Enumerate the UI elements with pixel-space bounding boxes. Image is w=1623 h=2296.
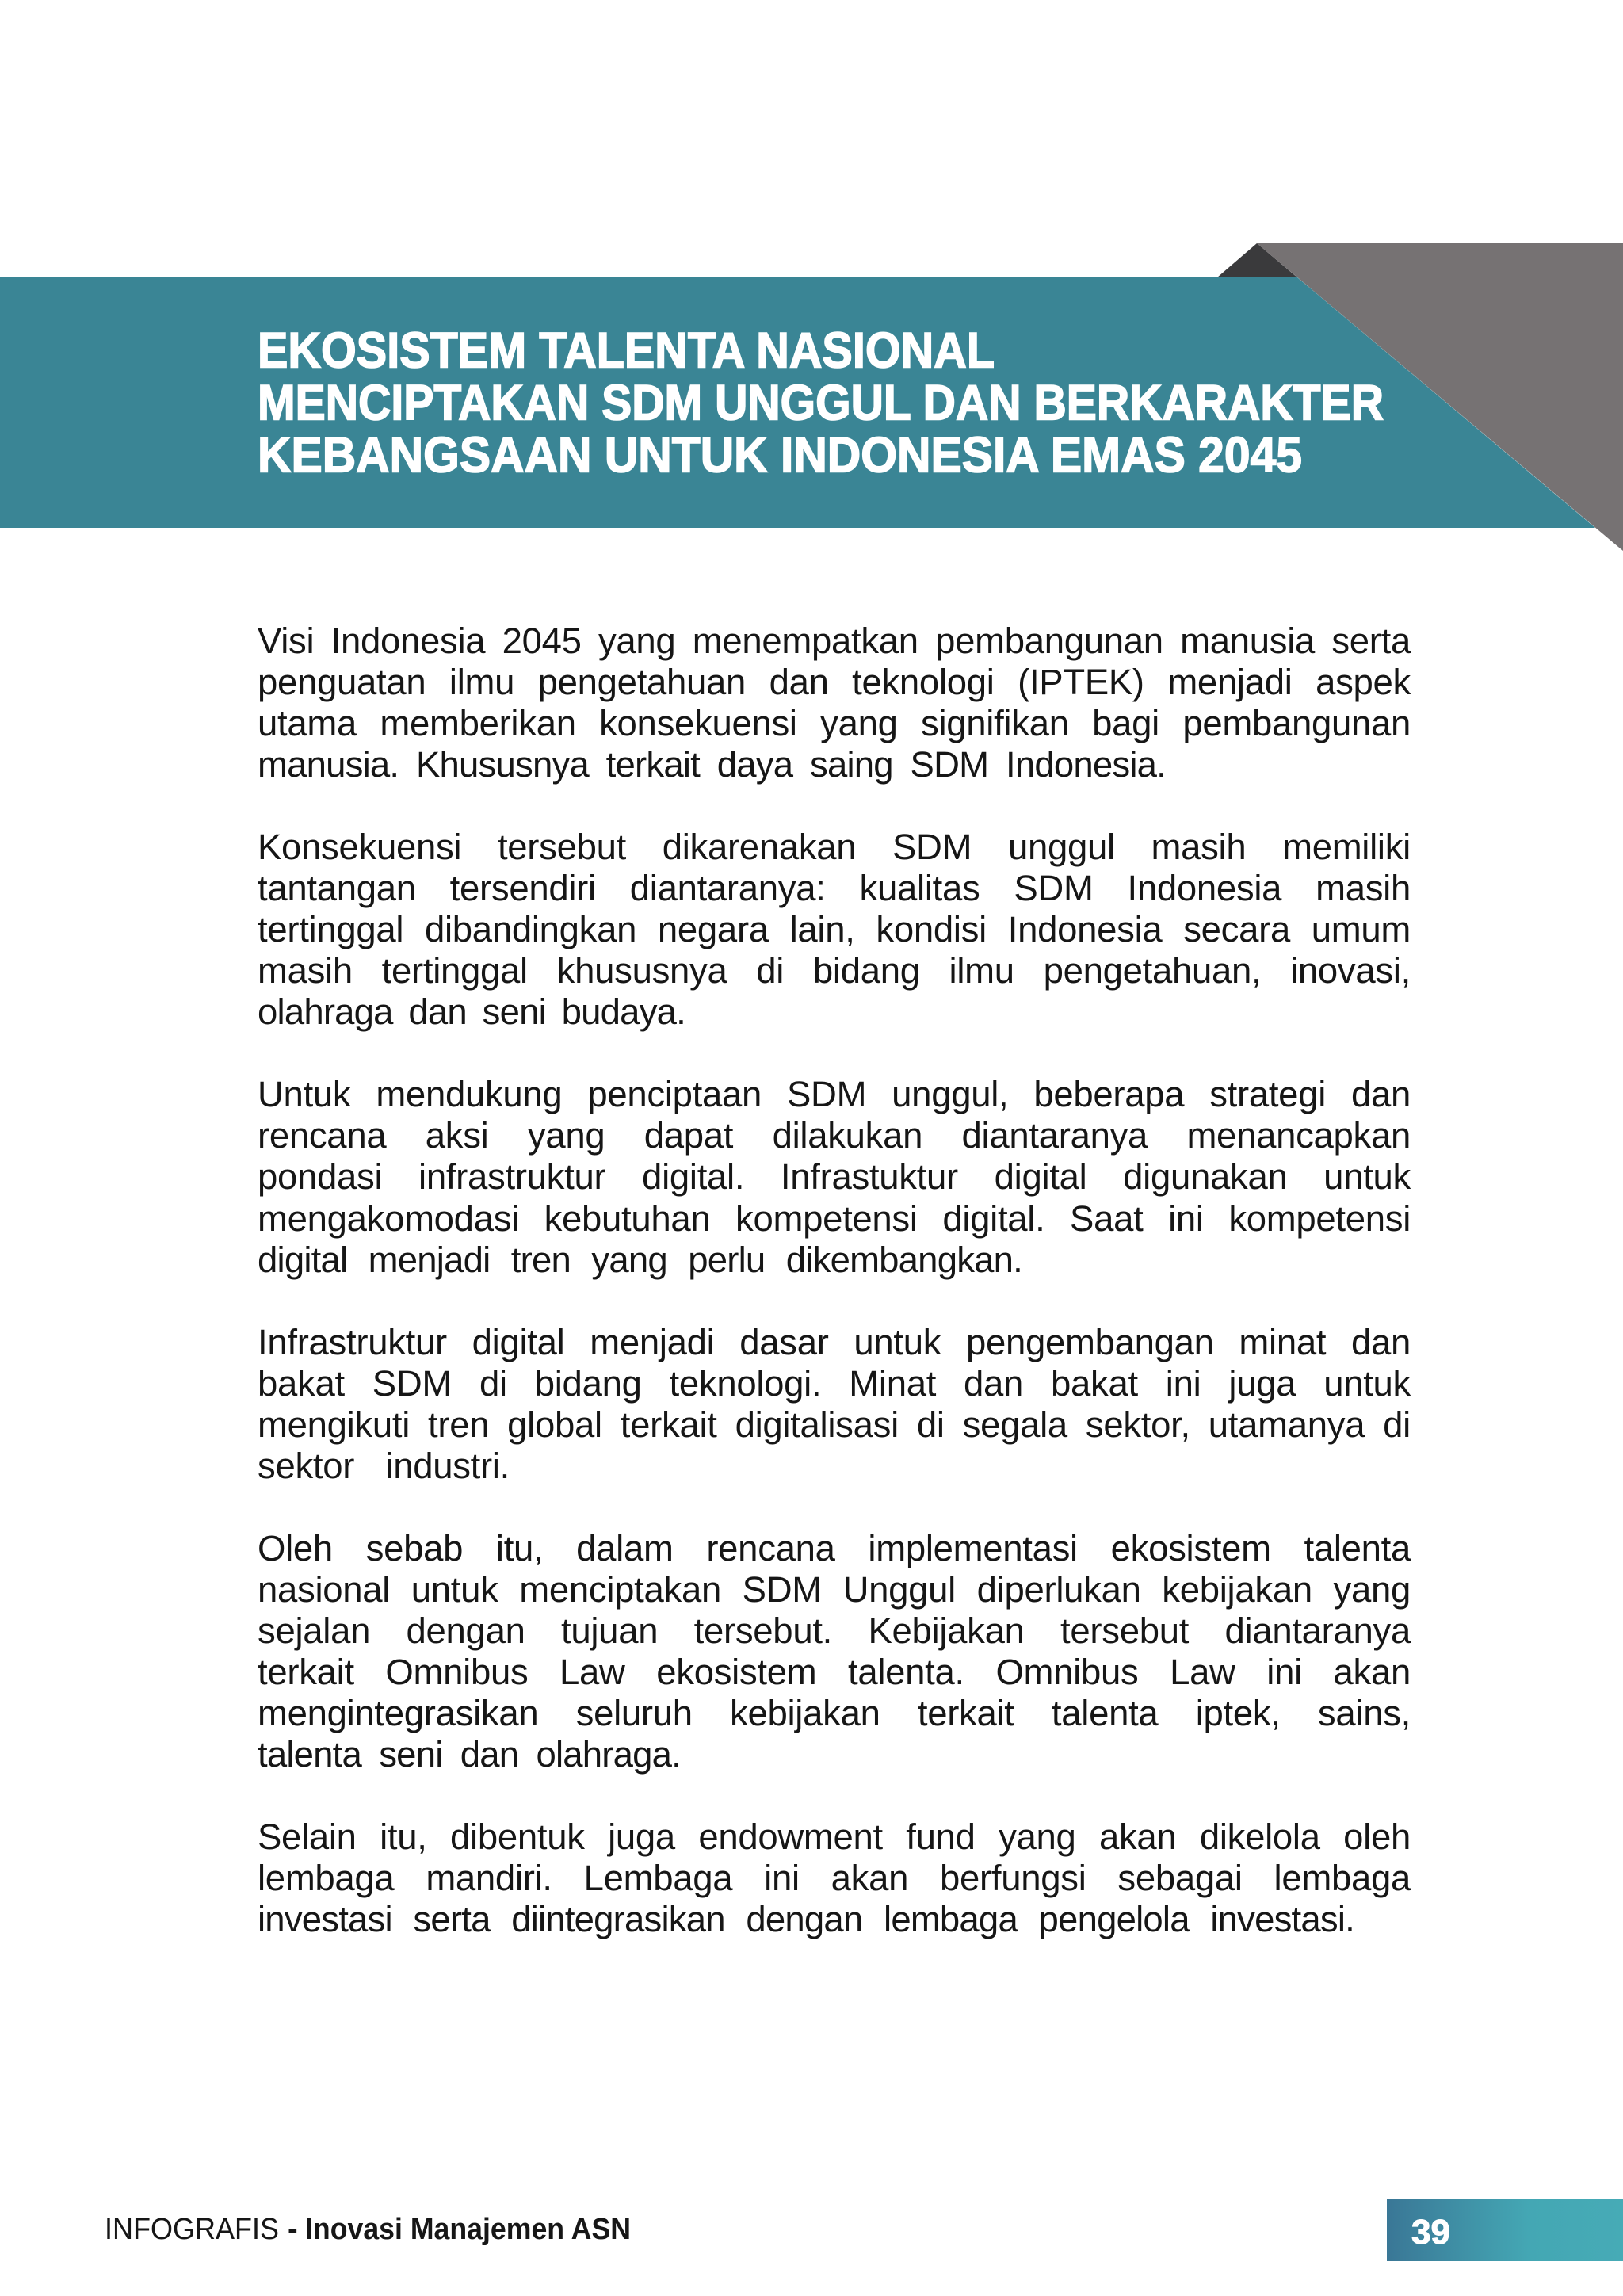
title: KEBANGSAAN UNTUK INDONESIA EMAS 2045 — [258, 428, 1302, 483]
paragraph 5: nasional untuk menciptakan SDM Unggul diperlukan kebijakan yang — [258, 1569, 1411, 1610]
paragraph 5 — [258, 1528, 1411, 1775]
paragraph 3: Untuk mendukung penciptaan SDM unggul, beberapa strategi dan — [258, 1074, 1411, 1114]
paragraph 1 — [258, 621, 1411, 785]
paragraph 2: tantangan tersendiri diantaranya: kualitas SDM Indonesia masih — [258, 868, 1411, 908]
footer label: INFOGRAFIS — [105, 2213, 279, 2246]
paragraph 6 — [258, 1817, 1411, 1939]
paragraph 5: mengintegrasikan seluruh kebijakan terkait talenta iptek, sains, — [258, 1693, 1411, 1733]
paragraph 4: bakat SDM di bidang teknologi. Minat dan bakat ini juga untuk — [258, 1363, 1411, 1404]
paragraph 4 — [258, 1322, 1411, 1486]
footer label: - — [288, 2213, 298, 2246]
title: EKOSISTEM TALENTA NASIONAL — [258, 323, 995, 379]
paragraph 4: sektor industri. — [258, 1446, 510, 1486]
paragraph 6: lembaga mandiri. Lembaga ini akan berfungsi sebagai lembaga — [258, 1858, 1411, 1898]
paragraph 2: olahraga dan seni budaya. — [258, 991, 685, 1032]
paragraph 5: terkait Omnibus Law ekosistem talenta. Omnibus Law ini akan — [258, 1652, 1411, 1692]
paragraph 4: Infrastruktur digital menjadi dasar untuk pengembangan minat dan — [258, 1322, 1411, 1362]
paragraph 6: investasi serta diintegrasikan dengan lembaga pengelola investasi. — [258, 1899, 1354, 1939]
title — [258, 323, 1384, 483]
paragraph 1: utama memberikan konsekuensi yang signifikan bagi pembangunan — [258, 703, 1411, 743]
paragraph 3: rencana aksi yang dapat dilakukan diantaranya menancapkan — [258, 1115, 1411, 1156]
paragraph 3: pondasi infrastruktur digital. Infrastuktur digital digunakan untuk — [258, 1156, 1411, 1197]
footer label: Inovasi Manajemen ASN — [305, 2213, 631, 2246]
paragraph 5: sejalan dengan tujuan tersebut. Kebijakan tersebut diantaranya — [258, 1610, 1411, 1651]
paragraph 2 — [258, 827, 1411, 1032]
grey corner triangle — [1257, 243, 1623, 551]
paragraph 4: mengikuti tren global terkait digitalisasi di segala sektor, utamanya di — [258, 1404, 1411, 1445]
page number box — [1387, 2199, 1623, 2261]
paragraph 2: masih tertinggal khususnya di bidang ilmu pengetahuan, inovasi, — [258, 950, 1411, 991]
teal title band — [0, 277, 1595, 528]
paragraph 1: Visi Indonesia 2045 yang menempatkan pembangunan manusia serta — [258, 621, 1411, 661]
paragraph 3: mengakomodasi kebutuhan kompetensi digital. Saat ini kompetensi — [258, 1198, 1411, 1239]
page number box: 39 — [1411, 2213, 1450, 2252]
paragraph 3: digital menjadi tren yang perlu dikembangkan. — [258, 1240, 1022, 1280]
dark fold triangle — [1217, 243, 1297, 277]
paragraph 6: Selain itu, dibentuk juga endowment fund yang akan dikelola oleh — [258, 1817, 1411, 1857]
paragraph 1: penguatan ilmu pengetahuan dan teknologi (IPTEK) menjadi aspek — [258, 662, 1411, 702]
header banner — [0, 243, 1623, 551]
footer label — [105, 2213, 631, 2246]
footer — [105, 2199, 1623, 2261]
paragraph 5: talenta seni dan olahraga. — [258, 1734, 681, 1775]
paragraph 2: tertinggal dibandingkan negara lain, kondisi Indonesia secara umum — [258, 909, 1411, 949]
title: MENCIPTAKAN SDM UNGGUL DAN BERKARAKTER — [258, 376, 1384, 431]
paragraph 1: manusia. Khususnya terkait daya saing SDM Indonesia. — [258, 744, 1166, 785]
paragraph 5: Oleh sebab itu, dalam rencana implementasi ekosistem talenta — [258, 1528, 1411, 1568]
paragraph 2: Konsekuensi tersebut dikarenakan SDM unggul masih memiliki — [258, 827, 1411, 867]
paragraph 3 — [258, 1074, 1411, 1280]
